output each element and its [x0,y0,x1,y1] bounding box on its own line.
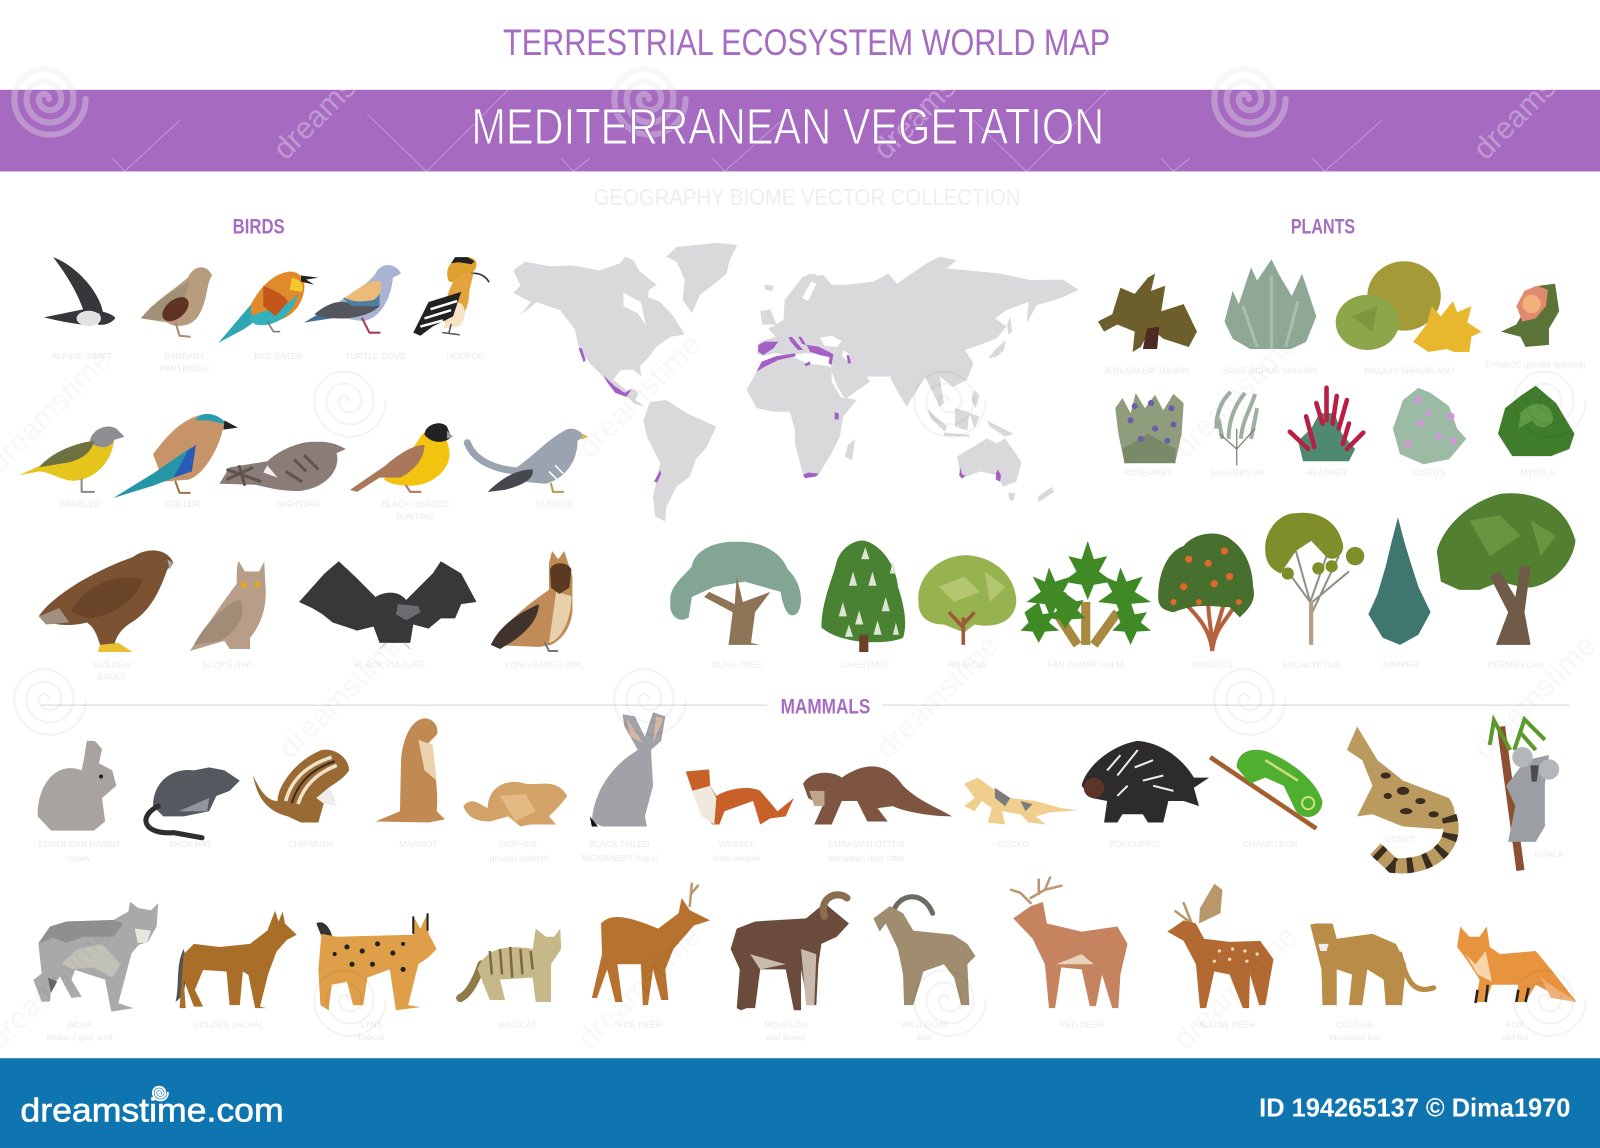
mammal: wolf [33,902,158,1042]
watermark: dreamstime [571,327,708,464]
mammal: wildcat: WILDCAT [498,1020,537,1030]
mammal: weasel: WEASEL [719,839,755,849]
bird: barbary partridge: BARBARY [164,351,206,361]
mammals [33,712,1577,1042]
watermark: dreamstime [272,628,409,765]
banner [0,29,1600,171]
tree: kermes oak [1437,493,1576,669]
bird: hoopoe: HOOPOE [446,351,485,361]
mammal: pack rat [146,767,240,849]
mammal: black-tailed jackrabbit [580,712,665,863]
bird: black-headed bunting: BLACK-HEADED [382,499,449,509]
bird: black vulture: BLACK VULTURE [355,659,425,669]
bird: golden eagle: GOLDEN [94,659,131,669]
mammal: weasel [686,769,794,863]
mammal: weasel: least weasel [713,853,761,863]
mammal: fallow deer [1167,884,1273,1030]
mammal: gopher: ground squirrel [489,853,547,863]
mammal: fox: FOX [1506,1020,1524,1030]
mammal: porcupine [1082,741,1209,849]
bird: long-eared owl: LONG-EARED OWL [505,659,585,669]
tree: eucalyptus [1265,513,1364,669]
plant: myrtle: MYRTLE [1520,468,1555,478]
watermark [0,327,1600,1056]
mammal: ibex: WILD GOAT [901,1020,949,1030]
mammal: roe deer: ROE DEER [617,1020,662,1030]
watermark: dreamstime [1466,628,1600,765]
mammal: cougar [1310,923,1434,1042]
bird: nightjar [219,442,346,509]
plant: sage scrub shrubs [1223,259,1318,375]
title: TERRESTRIAL ECOSYSTEM WORLD MAP [503,22,1110,63]
bird: scops owl [190,561,266,669]
bird: black-headed bunting [350,423,453,521]
mammal: european rabbit [38,741,121,863]
tree: arbutus [1158,534,1254,669]
plant: cistus: CISTUS [1414,468,1446,478]
mammal: black-tailed jackrabbit: BLACK TAILED [589,839,650,849]
bird: roller [113,414,238,509]
mammal: gecko [964,778,1079,849]
mammal: mouflon: MOUFLON [764,1020,807,1030]
bird: warbler [18,427,124,509]
footer logo: dreamstime.com [20,1092,284,1129]
bird: black-headed bunting: BUNTING [396,511,435,521]
bird: black vulture [299,561,477,669]
mammal: chameleon: CHAMELEON [1243,839,1298,849]
mammal: koala: KOALA [1535,849,1564,859]
birds [18,257,588,682]
watermark: dreamstime [1167,327,1304,464]
tree: eucalyptus: EUCALYPTUS [1283,659,1340,669]
tree: juniper: JUNIPER [1381,659,1419,669]
tree: juniper [1368,517,1431,669]
mammal: fox: red fox [1502,1032,1529,1042]
bird: warbler: WARBLER [58,499,101,509]
mammal: gecko: GECKO [998,839,1029,849]
mammal: chameleon [1210,750,1322,849]
plant: rosemary: ROSEMARY [1123,468,1173,478]
plant: jerusalem thorn [1098,273,1197,375]
tree: pistacia [918,555,1016,669]
mammal: black-tailed jackrabbit: JACKRABBIT (hare) [580,853,659,863]
bird: barbary partridge [141,267,212,373]
image id and author: ID 194265137 © Dima1970 [1259,1094,1570,1122]
bird: turtle dove: TURTLE DOVE [345,351,406,361]
mammal: red deer: RED DEER [1059,1020,1104,1030]
tree: chestnut: CHESTNUT [842,659,890,669]
plant: maquis shrubland [1336,261,1482,375]
mammal: chipmunk [253,750,349,849]
bird: golden eagle [39,550,173,682]
tree: kermes oak: KERMES OAK [1488,659,1545,669]
mammal: wolf: WOLF [67,1020,92,1030]
mammal: marmot [376,718,445,849]
plant: sagebrush: SAGEBRUSH [1210,468,1264,478]
tree: fan dwarf palm: FAN DWARF PALM [1048,659,1124,669]
tree: olive: OLIVE TREE [711,659,762,669]
mammal: eurasian otter [803,766,952,863]
watermark: dreamstime [571,919,708,1056]
plants [670,259,1586,669]
mammal: eurasian otter: european river otter [829,853,904,863]
plant: sagebrush [1210,392,1264,478]
inland seas [802,282,850,399]
banner: dreamstime [867,29,1004,166]
bird: golden eagle: EAGLE [98,672,127,682]
plant: fynbos protea: FYNBOS (protea species) [1486,359,1586,369]
bird: hoopoe [413,257,489,361]
mammal: gopher: GOPHER [500,839,537,849]
banner: dreamstime [267,29,404,166]
bird: alpine swift: ALPINE SWIFT [52,351,112,361]
tree: chestnut [821,540,905,669]
plant: cistus [1393,388,1466,478]
footer bar [0,1058,1600,1148]
mammal: genet: GENET [1385,834,1416,844]
heading: plants: PLANTS [1291,215,1355,239]
tree: arbutus: ARBUTUS [1192,659,1233,669]
tree: olive [670,542,801,669]
mammal: fallow deer: FALLOW DEER [1194,1020,1255,1030]
world map [513,243,1079,521]
mammal: genet [1347,727,1455,866]
plant: maquis shrubland: MAQUIS SHRUBLAND [1364,365,1454,375]
banner: dreamstime [1467,29,1600,166]
mammal: lynx [316,913,437,1042]
mammal: mouflon: wild sheep [764,1032,806,1042]
plant: heather: HEATHER [1306,468,1347,478]
mammal: golden jackal: GOLDEN JACKAL [193,1020,265,1030]
mammal: cougar: mountain lion [1329,1032,1381,1042]
mammal: european rabbit: EUROPEAN RABBIT [38,839,121,849]
mammal: chipmunk: CHIPMUNK [288,839,335,849]
plant: sage scrub shrubs: SAGE SCRUB SHRUBS [1223,365,1318,375]
bird: nightjar: NIGHTJAR [276,499,320,509]
mammal: ibex: ibex [917,1032,933,1042]
mammal: red deer [1011,878,1128,1030]
mammal: lynx: LYNX [360,1020,383,1030]
mammal: fox [1457,927,1577,1042]
mammal: koala [1490,719,1564,870]
mammal: wildcat [460,929,561,1030]
bird: turtle dove [304,265,406,361]
mammal: golden jackal [176,911,297,1030]
subtitle: GEOGRAPHY BIOME VECTOR COLLECTION [594,184,1020,210]
mammal: lynx: bobcat [358,1032,385,1042]
watermark: dreamstime [1167,919,1304,1056]
heading: birds: BIRDS [233,215,285,239]
heading: mammals: MAMMALS [781,694,870,718]
bird: cuckoo: CUCKOO [536,499,574,509]
banner: MEDITERRANEAN VEGETATION [471,98,1104,155]
bird: alpine swift [44,257,115,361]
bird: bee-eater: BEE-EATER [254,351,303,361]
bird: long-eared owl [491,551,585,669]
plant: myrtle [1498,386,1574,478]
bird: bee-eater [218,271,318,361]
plant: fynbos protea [1486,284,1586,369]
mammal: roe deer [592,884,710,1030]
mammal: marmot: MARMOT [399,839,438,849]
bird: scops owl: SCOPS OWL [201,659,254,669]
bird: barbary partridge: PARTRIDGE [160,363,210,373]
mammal: mouflon [731,895,849,1042]
bird: roller: ROLLER [165,499,200,509]
plant: rosemary [1115,393,1184,478]
mammal: porcupine: PORCUPINE [1109,839,1161,849]
mammal: cougar: COUGAR [1336,1020,1374,1030]
tree: fan dwarf palm [1020,541,1151,669]
mammal: gopher [463,782,567,863]
mammal: pack rat: PACK RAT [170,839,213,849]
mammal: european rabbit: coney [68,853,92,863]
mammal: ibex [873,897,976,1042]
tree: pistacia: PISTACIA [947,659,986,669]
plant: jerusalem thorn: JERUSALEM THORN [1103,365,1188,375]
plant: heather [1290,388,1363,478]
watermark: dreamstime [869,628,1006,765]
mammal: wolf: timber / grey wolf [47,1032,113,1042]
mammal: eurasian otter: EURASIAN OTTER [828,839,904,849]
bird: cuckoo [467,429,588,509]
